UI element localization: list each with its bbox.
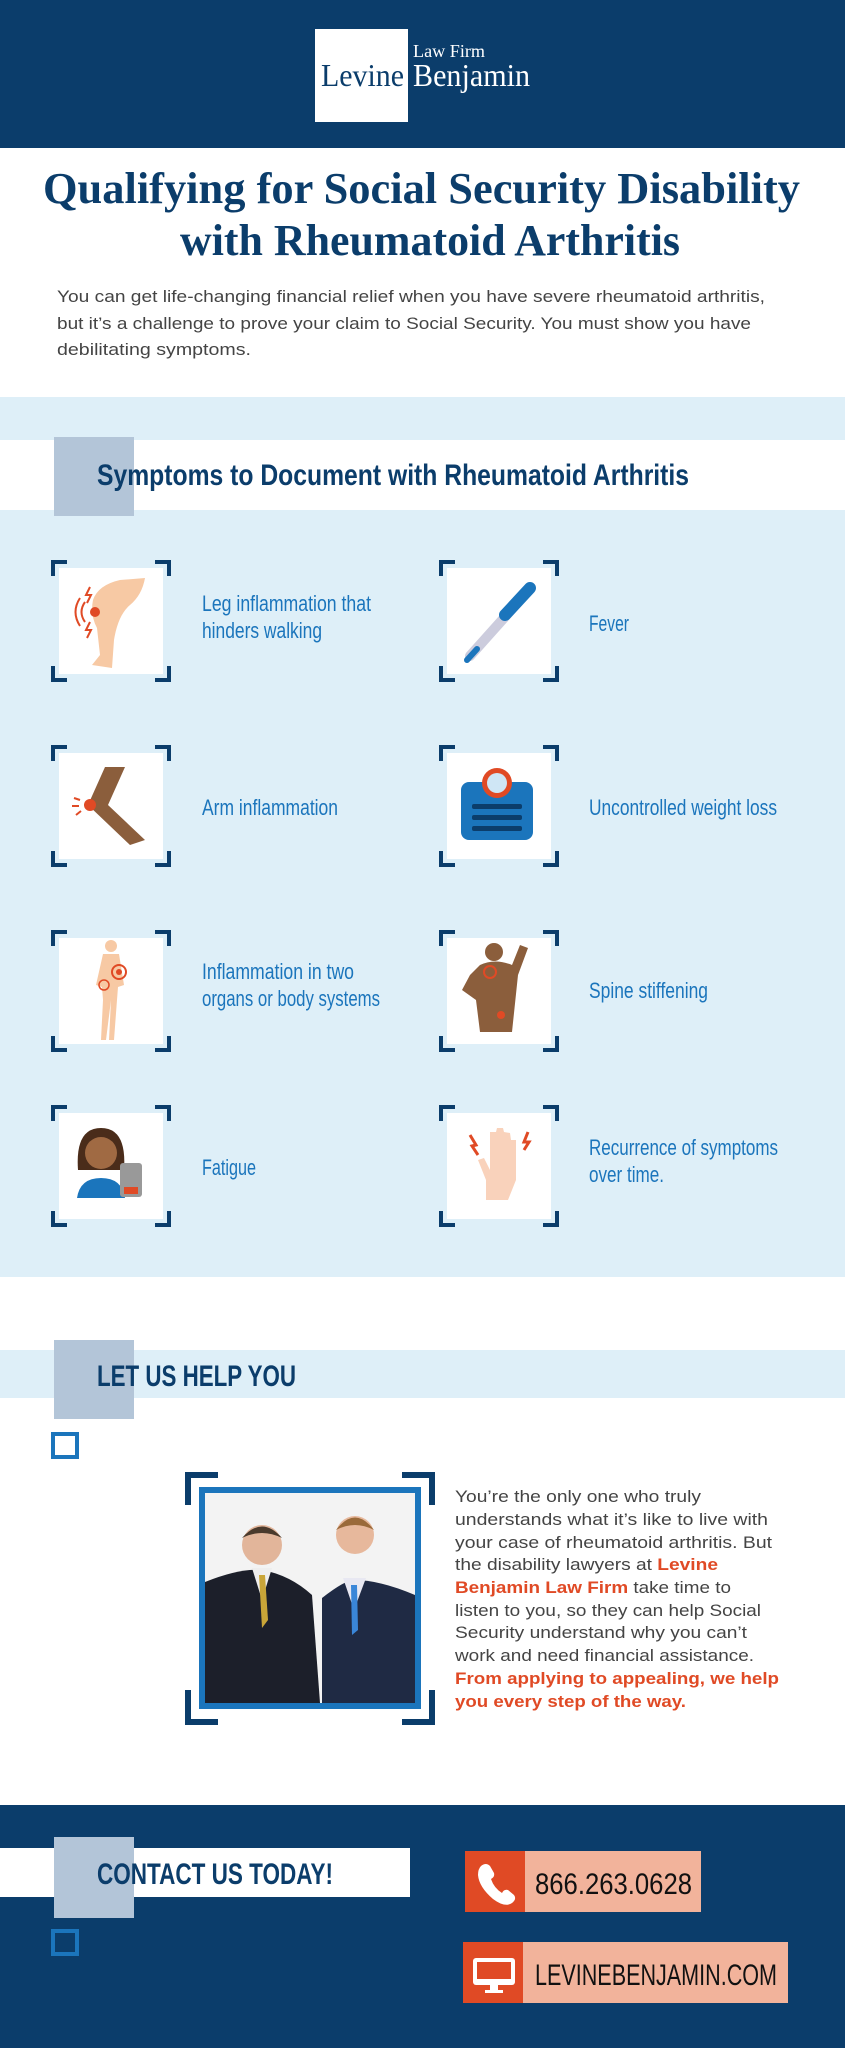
symptom: arm inflammation <box>53 747 338 865</box>
symptom: fever: Fever <box>589 611 629 636</box>
help paragraph: listen to you, so they can help Social <box>455 1601 761 1620</box>
logo: Benjamin <box>413 57 530 93</box>
help paragraph: From applying to appealing, we help <box>455 1669 779 1688</box>
heading: contact us today <box>0 1837 410 1918</box>
help paragraph: understands what it’s like to live with <box>455 1510 768 1529</box>
decorative small square footer <box>53 1931 77 1954</box>
intro paragraph: You can get life-changing financial relief when you have severe rheumatoid arthritis, <box>57 287 765 306</box>
help paragraph: you every step of the way. <box>455 1692 686 1711</box>
help paragraph: your case of rheumatoid arthritis. But <box>455 1533 772 1552</box>
decorative small square <box>53 1434 77 1457</box>
phone button: 866.263.0628 <box>535 1868 692 1901</box>
help paragraph: Security understand why you can’t <box>455 1623 747 1642</box>
panel: symptoms background <box>0 397 845 1277</box>
symptom: two organs: Inflammation in two <box>202 959 354 984</box>
symptom: recurrence: over time. <box>589 1162 664 1187</box>
symptom: fever <box>441 562 629 680</box>
symptom: fatigue: Fatigue <box>202 1155 256 1180</box>
logo: Law Firm <box>413 41 485 61</box>
intro paragraph: debilitating symptoms. <box>57 340 251 359</box>
icon: phone <box>478 1864 515 1905</box>
symptom: recurrence: Recurrence of symptoms <box>589 1135 778 1160</box>
phone button <box>465 1851 701 1912</box>
symptom: two organs <box>53 932 380 1050</box>
heading: contact us today: CONTACT US TODAY! <box>97 1858 333 1891</box>
heading: symptoms <box>54 437 689 516</box>
heading: let us help you <box>0 1340 845 1419</box>
logo <box>315 29 530 122</box>
heading: let us help you: LET US HELP YOU <box>97 1360 296 1393</box>
title: Qualifying for Social Security Disability <box>43 164 800 213</box>
symptom: leg inflammation: hinders walking <box>202 618 322 643</box>
symptom: arm inflammation: Arm inflammation <box>202 795 338 820</box>
help paragraph: the disability lawyers at Levine <box>455 1555 718 1574</box>
footer band <box>0 1805 845 2048</box>
symptom: spine <box>441 932 708 1050</box>
symptom: weight loss <box>441 747 777 865</box>
header band <box>0 0 845 148</box>
symptom: recurrence <box>441 1107 778 1225</box>
symptom: fatigue <box>53 1107 256 1225</box>
help paragraph: Benjamin Law Firm take time to <box>455 1578 731 1597</box>
symptom: weight loss: Uncontrolled weight loss <box>589 795 777 820</box>
icon: monitor <box>473 1958 515 1993</box>
symptom: two organs: organs or body systems <box>202 986 380 1011</box>
title: with Rheumatoid Arthritis <box>180 216 680 265</box>
help paragraph: You’re the only one who truly <box>455 1487 702 1506</box>
intro paragraph: but it’s a challenge to prove your claim to Social Security. You must show you have <box>57 314 751 333</box>
intro paragraph <box>57 287 765 359</box>
help paragraph <box>454 1487 779 1711</box>
heading: symptoms: Symptoms to Document with Rheumatoid Arthritis <box>97 459 689 492</box>
website button <box>463 1942 788 2003</box>
symptom: spine: Spine stiffening <box>589 978 708 1003</box>
photo of lawyers <box>188 1475 432 1722</box>
symptom: leg inflammation <box>53 562 371 680</box>
logo: Levine <box>321 57 404 93</box>
help paragraph: work and need financial assistance. <box>454 1646 754 1665</box>
symptom: leg inflammation: Leg inflammation that <box>202 591 371 616</box>
title <box>43 164 800 265</box>
